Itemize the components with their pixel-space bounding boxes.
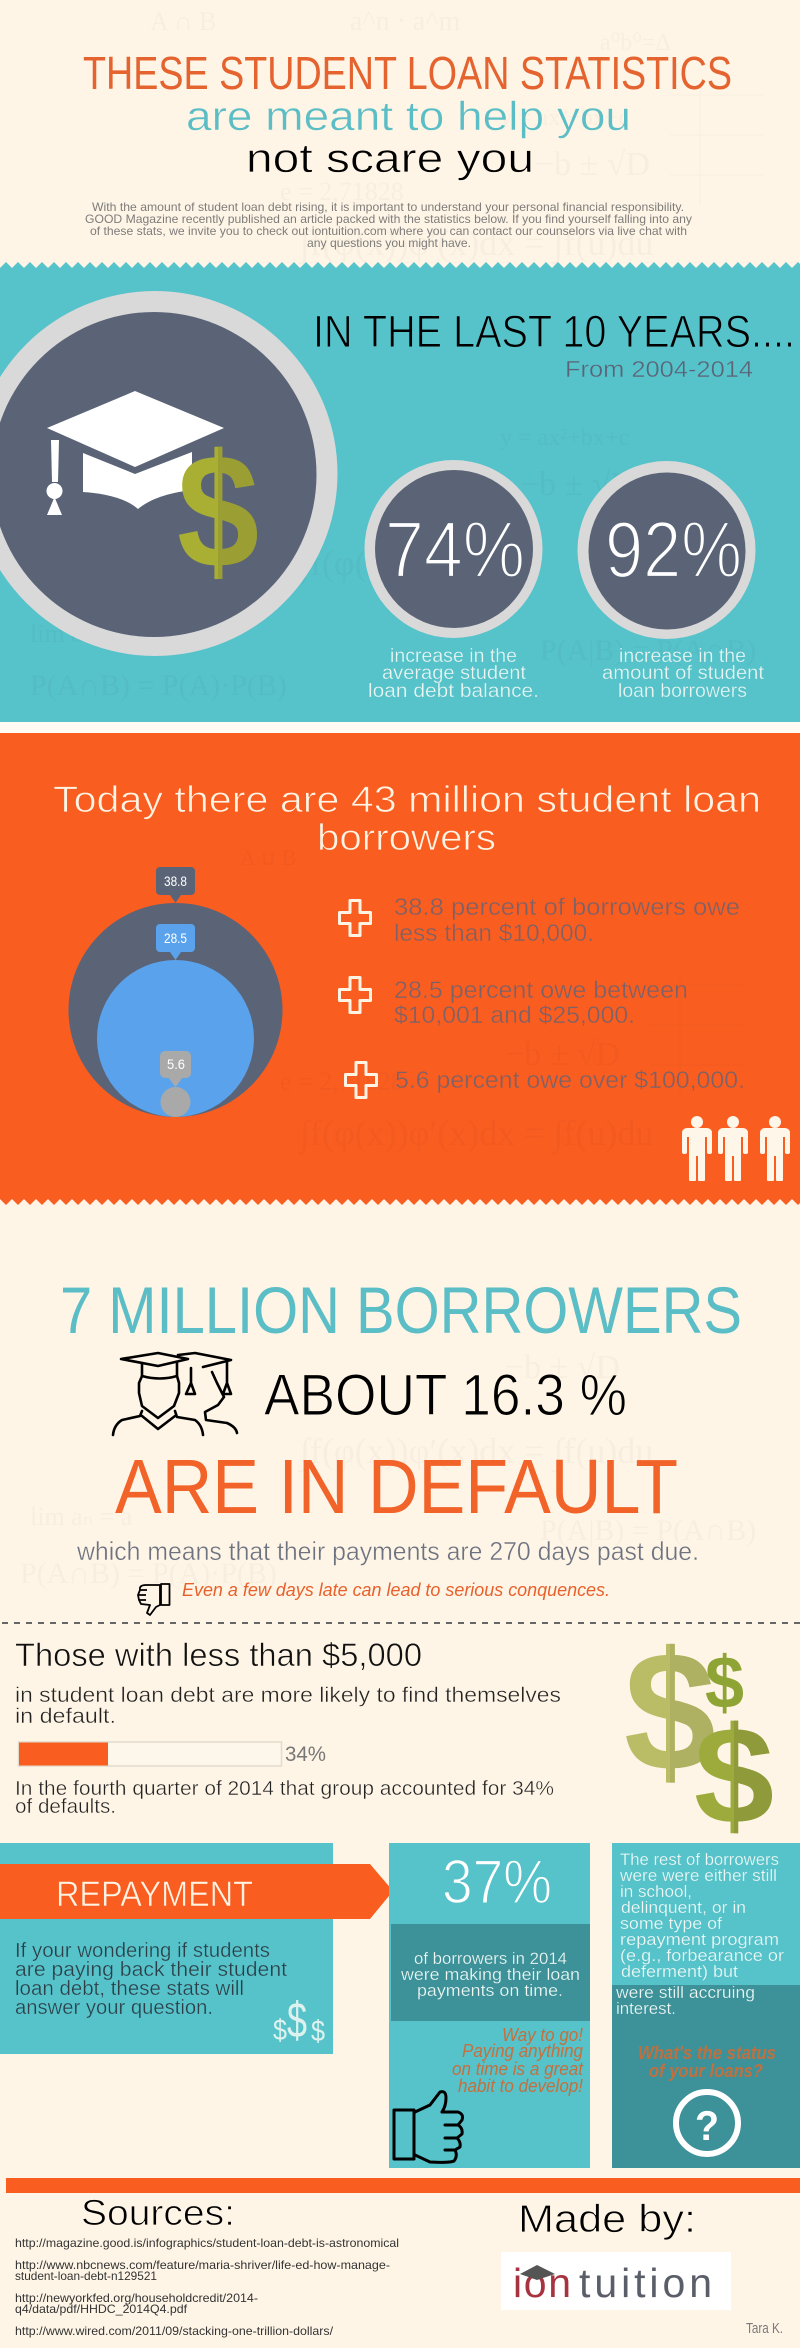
icon: dollars (626, 1644, 772, 1834)
text: y = ax²+bx+c (500, 105, 629, 131)
text block: payments on time. (417, 1981, 563, 2000)
label: 38.8: 38.8 (164, 873, 187, 889)
icon: dollars: $ (694, 1699, 774, 1853)
text block: were were either still (619, 1866, 777, 1885)
stat: 92 percent: amount of student (602, 663, 765, 684)
icon: thumbs up (394, 2092, 462, 2162)
text block: in student loan debt are more likely to find themselves (15, 1684, 561, 1707)
text: 38.8 percent (394, 894, 740, 947)
icon: dollar signs (273, 1992, 325, 2048)
text: 28.5 percent (394, 977, 688, 1029)
icon: question mark: ? (695, 2102, 719, 2149)
source links: q4/data/pdf/HHDC_2014Q4.pdf (15, 2302, 188, 2316)
icon: three people (682, 1116, 790, 1181)
intro text (85, 200, 692, 250)
icon: question mark (676, 2092, 738, 2154)
panel: 43 million borrowers: ∫f(φ(x))φ′(x)dx = ∫f(u)du (298, 1113, 653, 1155)
text: −b ± √D (505, 1349, 620, 1386)
intro text: of these stats, we invite you to check out iontuition.com where you can contact our counselors via live chat with (90, 224, 687, 238)
text block: in school, (620, 1882, 692, 1901)
text block: some type of (620, 1914, 722, 1933)
panel: 37 percent (389, 1843, 590, 2168)
icon: dollars: $ (705, 1641, 744, 1724)
icon: thumbs down (138, 1584, 170, 1615)
title: not scare you (246, 135, 534, 181)
icon: dollars: $ (624, 1617, 716, 1807)
logo: iontuition: ion (513, 2260, 571, 2306)
text block: (e.g., forbearance or (620, 1946, 784, 1965)
text block: were making their loan (400, 1965, 580, 1984)
callout (638, 2043, 776, 2081)
text: a⁰b⁰=Δ (600, 30, 671, 56)
text: 38.8 percent: less than $10,000. (394, 920, 594, 947)
text: e = 2,71828 (280, 177, 404, 206)
heading: Those with less than $5,000 (15, 1637, 422, 1673)
text: ∫f(φ(x))φ′(x)dx = ∫f(u)du (298, 1431, 653, 1473)
stat: 74 percent: average student (382, 663, 527, 684)
text block: answer your question. (15, 1997, 213, 2019)
logo: iontuition (501, 2252, 731, 2310)
text block (400, 1949, 580, 2000)
stat: 92 percent: increase in the (619, 646, 746, 667)
label: 5.6 (160, 1051, 191, 1087)
text: a^n · a^m (350, 6, 460, 37)
text: P(A|B) = P(A∩B) (540, 1514, 756, 1547)
text block: delinquent, or in (621, 1898, 746, 1917)
panel: 43 million borrowers: −b ± √D (505, 1036, 620, 1073)
icon: plus 3 (346, 1062, 376, 1098)
text: 270 days past due: which means that their payments are 270 days past due. (76, 1536, 699, 1566)
text block: If your wondering if students (15, 1940, 270, 1962)
stat: 74 percent: 74% (385, 505, 525, 594)
stat: 74 percent: loan debt balance. (368, 681, 539, 702)
section: less than 5000 (15, 1637, 561, 1818)
text block (615, 1850, 784, 2018)
title: are meant to help you (186, 93, 631, 139)
text: 28.5 percent: $10,001 and $25,000. (394, 1002, 635, 1029)
heading: repayment: REPAYMENT (56, 1875, 253, 1914)
stat: 92 percent: loan borrowers (618, 681, 747, 702)
callout: Paying anything (462, 2041, 583, 2061)
label: 28.5: 28.5 (164, 930, 187, 946)
source links: http://www.nbcnews.com/feature/maria-shriver/life-ed-how-manage- (15, 2258, 390, 2272)
text block: loan debt, these stats will (15, 1978, 244, 2000)
chart: nested circles (68, 867, 282, 1117)
icon: dollar signs: $ (287, 1992, 307, 2048)
text block: repayment program (620, 1930, 779, 1949)
text block: of borrowers in 2014 (414, 1949, 567, 1968)
text block: in default. (15, 1705, 116, 1728)
label: 5.6: 5.6 (167, 1056, 185, 1072)
text: ∫f(φ(x))φ′(x)dx = ∫f(u)du (298, 223, 653, 265)
panel: 43 million borrowers: e = 2,71828 (280, 1067, 404, 1096)
text block: were still accruing (615, 1983, 755, 2002)
progress bar: 34% (285, 1743, 326, 1766)
stat: 74 percent (364, 460, 542, 702)
text: P(A∩B) = P(A)·P(B) (20, 1557, 277, 1590)
callout: of your loans? (649, 2061, 763, 2081)
panel: last 10 years: −b ± √D (520, 466, 635, 503)
icon: dollar sign (179, 446, 257, 579)
icon: plus 2 (340, 978, 370, 1012)
source links: http://newyorkfed.org/householdcredit/2014- (15, 2291, 258, 2305)
heading: 43 million: borrowers (317, 817, 496, 858)
panel: last 10 years: ∫f(φ(x))φ′(x)dx (298, 543, 515, 585)
panel: repayment (0, 1843, 393, 2054)
text block: are paying back their student (15, 1959, 287, 1981)
panel: last 10 years: P(A|B) = P(A∩B) (540, 634, 756, 667)
heading: 43 million (53, 779, 761, 858)
panel: 43 million borrowers: A ∪ B (240, 845, 296, 870)
text block (15, 1684, 561, 1728)
panel: rest of borrowers (612, 1843, 800, 2168)
heading: are in default: ARE IN DEFAULT (115, 1444, 678, 1530)
stat: 37%: 37% (442, 1848, 552, 1917)
source links: http://magazine.good.is/infographics/student-loan-debt-is-astronomical (15, 2236, 399, 2250)
panel: last 10 years: lim aₙ = a (30, 619, 133, 648)
panel: last 10 years: P(A∩B) = P(A)·P(B) (30, 669, 287, 702)
source links: student-loan-debt-n129521 (15, 2269, 157, 2283)
text block (15, 1940, 287, 2019)
text block: of defaults. (15, 1796, 116, 1818)
source links: http://www.wired.com/2011/09/stacking-one-trillion-dollars/ (15, 2324, 334, 2338)
heading: sources: Sources: (81, 2192, 235, 2233)
label: 28.5 (156, 924, 195, 960)
callout (452, 2025, 584, 2096)
icon: dollar signs: $ (311, 2015, 325, 2048)
ribbon (0, 1864, 393, 1919)
text: 28.5 percent: 28.5 percent owe between (394, 977, 688, 1004)
credit: Tara K.: Tara K. (746, 2320, 783, 2337)
intro text: With the amount of student loan debt rising, it is important to understand your personal financial responsibility. (92, 200, 684, 214)
big circle with cap icon (0, 291, 338, 656)
text: 38.8 percent: 38.8 percent of borrowers owe (394, 894, 740, 921)
icon: dollar sign: $ (177, 421, 259, 602)
label: 38.8 (156, 867, 195, 903)
intro text: any questions you might have. (307, 236, 471, 250)
stat: 92 percent (578, 461, 765, 702)
logo: iontuition: tuition (579, 2260, 712, 2306)
icon: graduation cap (46, 391, 224, 515)
icon: dollars: $ (624, 1617, 716, 1807)
panel: last 10 years (0, 262, 800, 733)
text: serious consequences: Even a few days late can lead to serious conquences. (182, 1580, 610, 1600)
text: 5.6 percent: 5.6 percent owe over $100,000. (395, 1067, 745, 1094)
callout: habit to develop! (458, 2076, 583, 2096)
text block: interest. (616, 1999, 676, 2018)
icon: dollars: $ (694, 1699, 774, 1853)
icon: plus 1 (340, 900, 370, 936)
text: lim aₙ = a (30, 1502, 133, 1531)
text block: deferment) but (621, 1962, 738, 1981)
subheading: from 2004-2014: From 2004-2014 (565, 356, 753, 382)
intro text: GOOD Magazine recently published an article packed with the statistics below. If you find yourself falling into any (85, 212, 692, 226)
icon: graduates (113, 1353, 237, 1435)
title (83, 47, 732, 181)
panel: 43 million borrowers (0, 733, 800, 1205)
orange divider (6, 2178, 800, 2193)
callout: on time is a great (452, 2059, 584, 2079)
stat list (340, 894, 745, 1098)
stat: 92 percent: 92% (605, 505, 742, 594)
icon: dollar sign: $ (177, 421, 259, 602)
callout: What's the status (638, 2043, 776, 2063)
text block: The rest of borrowers (620, 1850, 779, 1869)
text: −b ± √D (535, 146, 650, 183)
text block: In the fourth quarter of 2014 that group accounted for 34% (15, 1778, 554, 1800)
panel: last 10 years: y = ax²+bx+c (500, 425, 629, 451)
heading: made by: Made by: (518, 2198, 696, 2241)
stat: 74 percent: increase in the (390, 646, 517, 667)
progress bar (18, 1742, 326, 1766)
text: A ∩ B (150, 7, 216, 36)
text block (15, 1778, 554, 1818)
text: about 16.3 percent: ABOUT 16.3 % (264, 1363, 627, 1428)
source links (15, 2236, 399, 2338)
icon: dollar signs: $ (273, 2014, 287, 2047)
callout: Way to go! (502, 2025, 583, 2045)
heading: 43 million: Today there are 43 million student loan (53, 779, 761, 820)
